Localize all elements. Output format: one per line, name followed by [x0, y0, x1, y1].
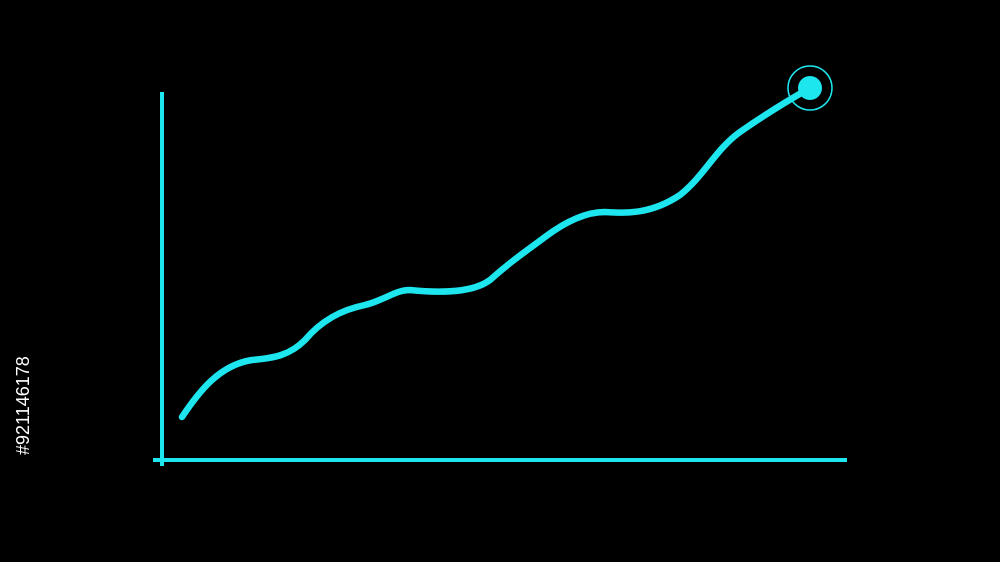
growth curve: [182, 88, 810, 417]
y axis: [160, 92, 164, 466]
x axis: [153, 458, 847, 462]
side id text: #921146178: [13, 356, 33, 455]
endpoint marker: [788, 66, 832, 110]
